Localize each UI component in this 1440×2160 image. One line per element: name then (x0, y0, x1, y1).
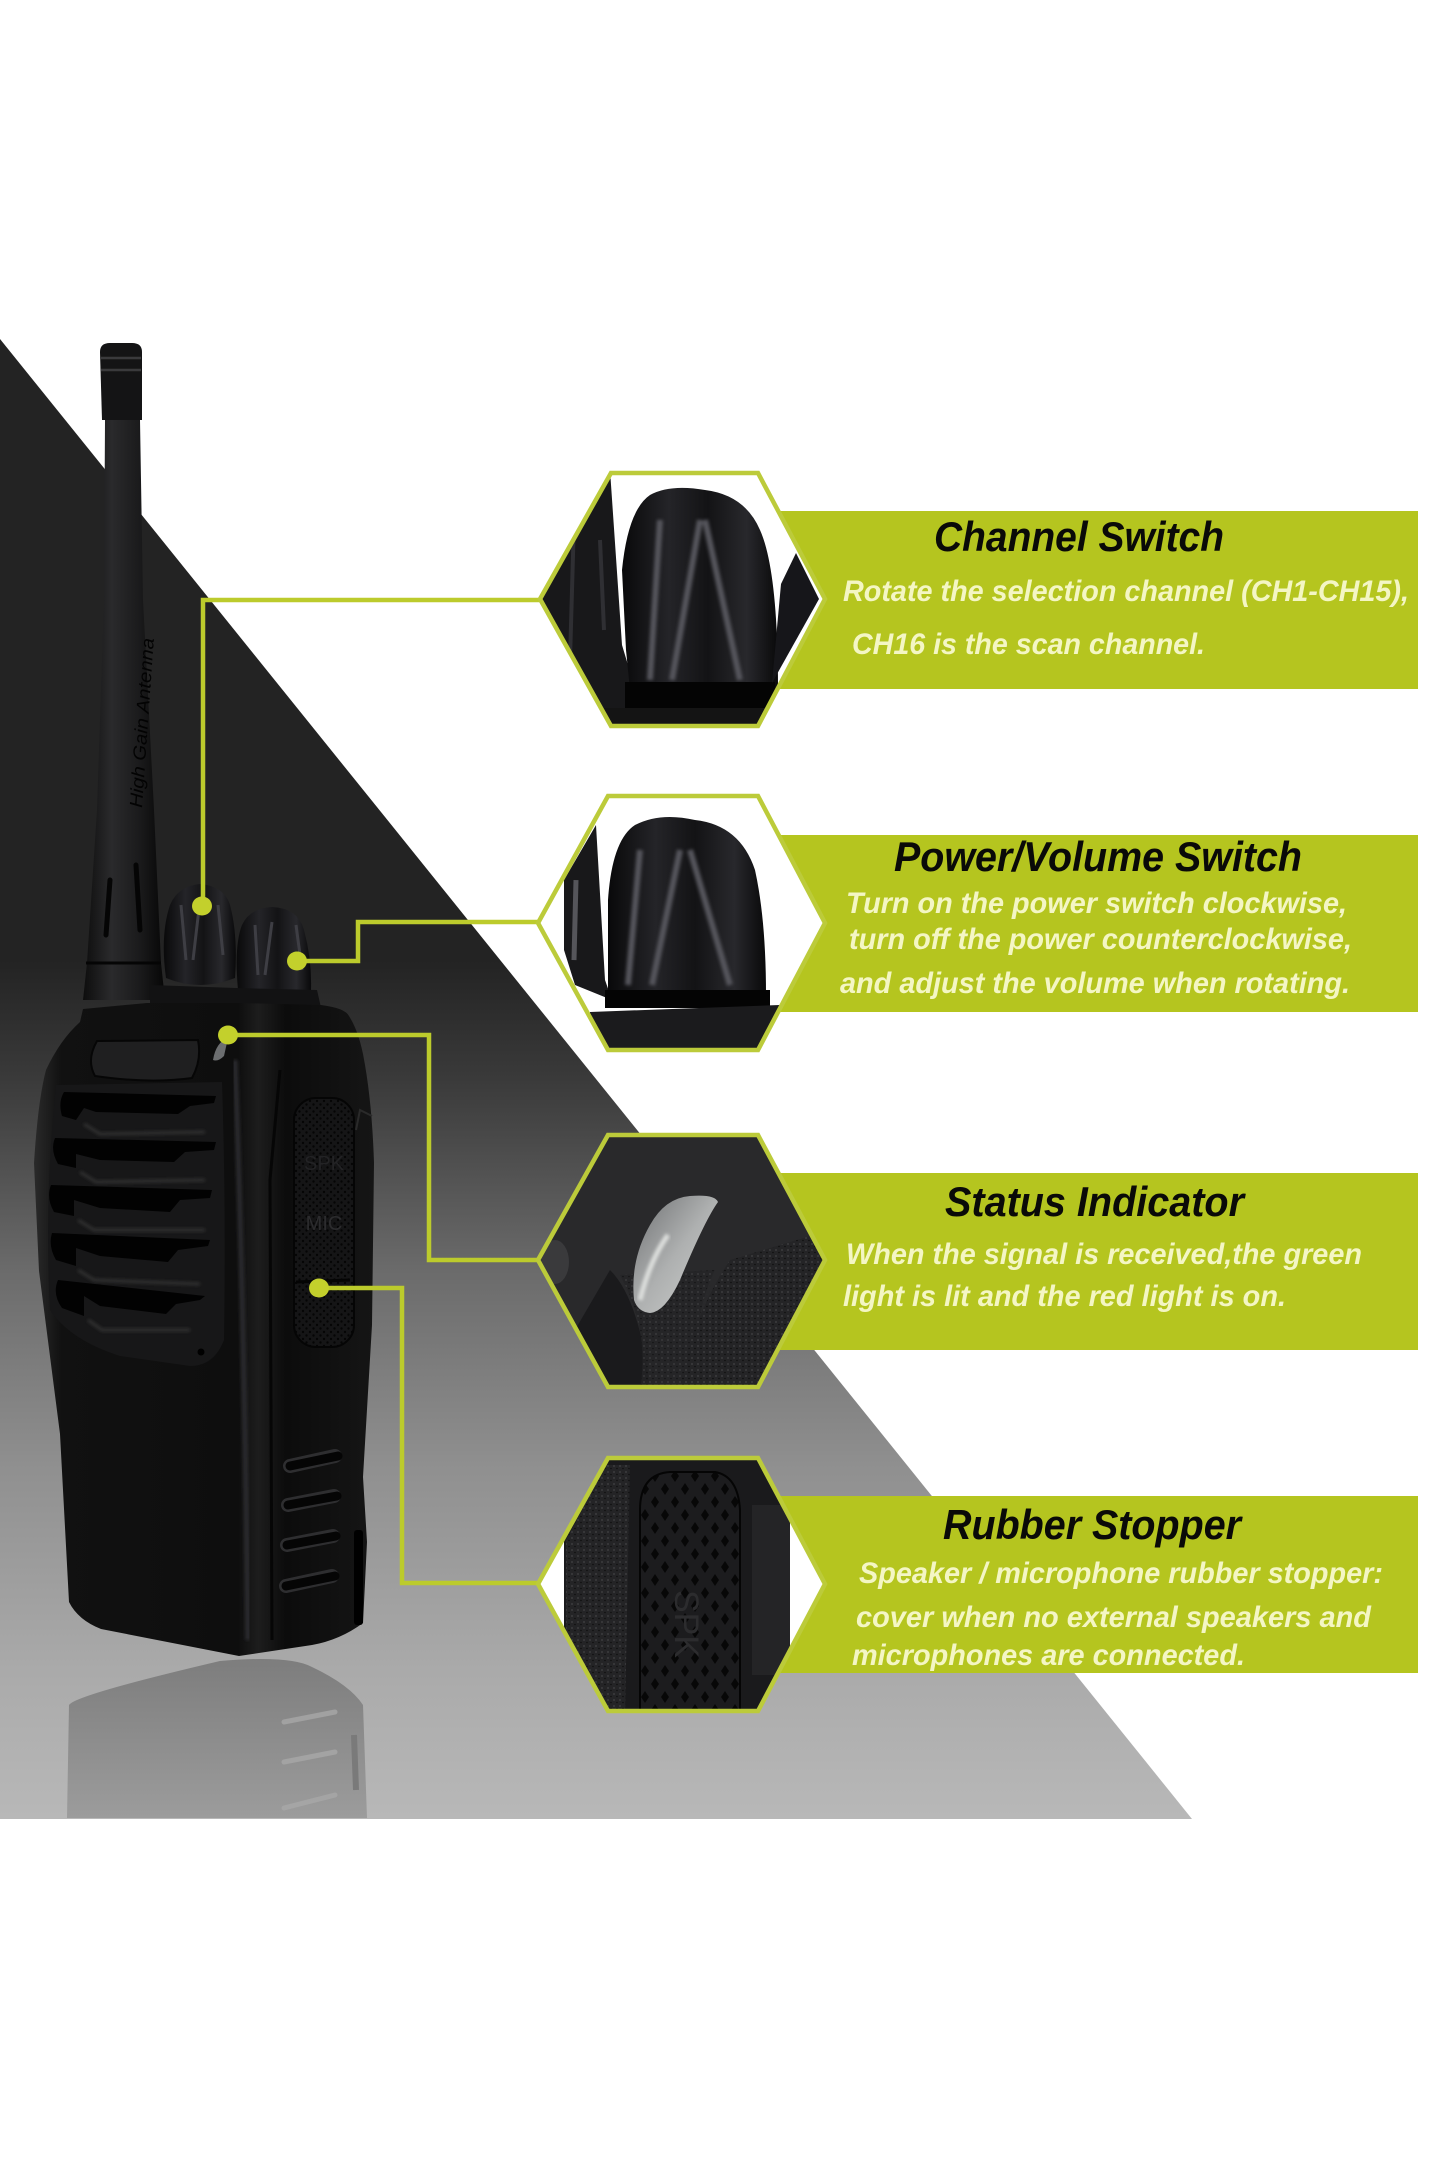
description: turn off the power counterclockwise, (849, 923, 1352, 956)
description: cover when no external speakers and (856, 1601, 1372, 1634)
radio reflection (67, 1659, 367, 1818)
description: When the signal is received,the green (846, 1238, 1362, 1271)
speaker surround (48, 1082, 225, 1366)
side grip slits (286, 1456, 335, 1586)
heading: Power/Volume Switch (894, 833, 1302, 880)
description (852, 1557, 1383, 1672)
callout anchor dots (192, 896, 329, 1298)
microphone hole (198, 1348, 204, 1356)
description (843, 575, 1409, 661)
heading: Status Indicator (945, 1178, 1246, 1225)
description: microphones are connected. (852, 1639, 1245, 1672)
antenna lettering: High Gain Antenna (126, 637, 158, 808)
speaker rubber stopper: MIC (306, 1213, 342, 1235)
hexagon detail: channel knob (535, 470, 825, 732)
antenna (83, 343, 165, 1000)
panel: channel switch (535, 470, 1418, 732)
side ridge highlight (235, 1060, 248, 1640)
speaker rubber stopper (294, 1098, 354, 1347)
knob: channel (164, 884, 236, 985)
speaker grille (49, 1092, 216, 1356)
heading: Channel Switch (934, 513, 1224, 560)
speaker rubber stopper: SPK (304, 1153, 345, 1175)
radio body (34, 1003, 374, 1656)
description: Rotate the selection channel (CH1-CH15), (843, 575, 1409, 608)
panel: power/volume switch (538, 796, 1418, 1055)
panel: status indicator (538, 1135, 1418, 1390)
knob base bar (150, 985, 322, 1016)
hexagon detail: rubber stopper: SPK (667, 1590, 705, 1658)
description: Speaker / microphone rubber stopper: (859, 1557, 1383, 1590)
walkie-talkie radio (34, 343, 374, 1656)
hexagon detail: rubber stopper (538, 1458, 825, 1715)
diagonal gradient backdrop (0, 339, 1192, 1819)
description (843, 1238, 1362, 1313)
hexagon detail: LED window (538, 1135, 830, 1390)
side port (354, 1530, 363, 1625)
hexagon detail: power knob (538, 796, 825, 1055)
description (840, 887, 1352, 1000)
knob: power (237, 907, 311, 995)
status LED window (213, 1038, 228, 1060)
description: CH16 is the scan channel. (852, 628, 1205, 661)
description: and adjust the volume when rotating. (840, 967, 1350, 1000)
description: light is lit and the red light is on. (843, 1280, 1286, 1313)
panel: rubber stopper (538, 1458, 1418, 1715)
callout lines (203, 600, 540, 1583)
description: Turn on the power switch clockwise, (846, 887, 1347, 920)
heading: Rubber Stopper (943, 1501, 1243, 1548)
screen (91, 1040, 199, 1081)
